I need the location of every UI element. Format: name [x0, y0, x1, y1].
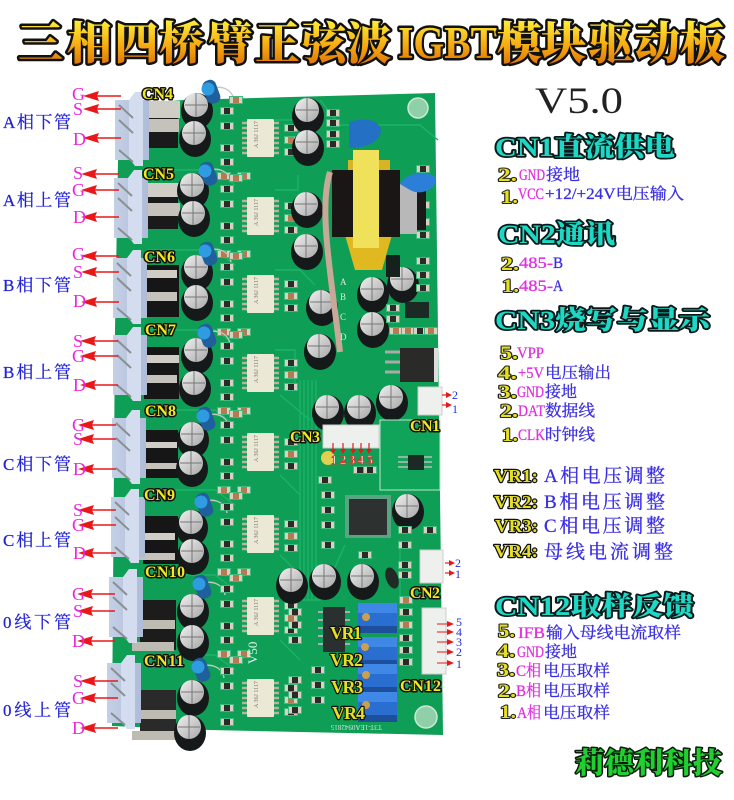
channel 2 CN5	[114, 160, 298, 258]
VR1: A相电压调整	[544, 465, 665, 487]
pin 2: 2.	[498, 681, 516, 702]
connector tags on board: VR4	[332, 703, 365, 723]
pin letters G S D: S	[73, 99, 83, 119]
heading CN2: CN2通讯	[498, 220, 615, 249]
pin letters G S D: D	[73, 291, 86, 311]
VR4: VR4:	[494, 541, 538, 561]
board traces	[148, 100, 438, 670]
channel 2 CN5: A 36J 1117	[254, 199, 260, 226]
pin 2: 接地	[546, 165, 580, 184]
pin letters G S D: G	[72, 346, 85, 366]
transformer: C	[340, 312, 346, 322]
pin 2: B	[553, 255, 563, 272]
pin 2: 2.	[501, 254, 519, 275]
pin letters G S D: D	[72, 631, 85, 651]
heading CN3: CN3烧写与显示	[495, 306, 714, 335]
pin letters G S D: D	[73, 129, 86, 149]
connector pin callouts: 1	[456, 657, 462, 671]
pin 4: 4.	[498, 363, 517, 384]
control area parts	[288, 466, 437, 714]
VR3	[495, 515, 665, 537]
pin 1: A	[553, 278, 563, 295]
callouts: gate source drain arrows	[77, 91, 121, 733]
VR2	[494, 491, 665, 513]
phase labels: 0线上管	[3, 701, 71, 720]
connector tags on board: CN1	[410, 418, 440, 435]
panel: CN12 description	[495, 591, 695, 723]
pin 5	[500, 343, 544, 364]
VR4: 母线电流调整	[544, 541, 673, 563]
pin 1	[500, 702, 610, 723]
blue trim potentiometers	[358, 603, 397, 722]
pin 2: GND	[519, 167, 545, 184]
pin letters G S D: G	[72, 84, 85, 104]
connector pin callouts	[437, 388, 462, 671]
channel 3 CN6	[113, 240, 298, 336]
pin letters G S D: G	[72, 180, 85, 200]
panel: VR adjustments	[494, 465, 673, 563]
pin 1: CLK	[518, 427, 545, 444]
pin 1: +12/+24V电压输入	[545, 185, 684, 203]
transformer: A	[340, 277, 347, 287]
connector tags on board: CN9	[144, 487, 175, 504]
transformer	[325, 120, 436, 352]
channel 7 CN10: A 36J 1117	[254, 599, 260, 626]
pin 1	[502, 425, 595, 446]
pin letters G S D: G	[72, 584, 85, 604]
pin 5: 5.	[500, 343, 518, 364]
phase labels: B相上管	[3, 363, 71, 382]
pin 5: VPP	[517, 345, 544, 362]
microcontroller	[345, 495, 391, 538]
lower capacitors	[276, 385, 424, 604]
connector pin callouts: 5	[456, 615, 462, 629]
pin letters G S D: S	[73, 671, 83, 691]
pin 4: +5V	[518, 365, 544, 382]
pin letters G S D: S	[73, 601, 83, 621]
small parts upper right	[326, 109, 438, 335]
pin 3: 接地	[545, 382, 577, 401]
pin 3: 3.	[498, 382, 517, 403]
panel: CN3 description	[495, 306, 714, 446]
pin letters G S D: S	[73, 163, 83, 183]
pin 1: 1.	[501, 187, 518, 208]
pin 4	[498, 363, 611, 384]
connector CN3	[321, 425, 379, 465]
phase labels: A相下管	[3, 113, 71, 132]
pin 3	[498, 382, 577, 403]
pin 5	[498, 621, 681, 642]
pin letters G S D: G	[72, 515, 85, 535]
connector pin callouts: 4	[456, 625, 462, 639]
heading CN1: CN1直流供电	[495, 133, 675, 162]
channel 4 CN7: A 36J 1117	[254, 356, 260, 383]
pin letters G S D: D	[73, 459, 86, 479]
pin 2	[501, 254, 563, 275]
title: 模块驱动板	[497, 19, 725, 69]
phase labels: C相下管	[3, 455, 71, 474]
VR1	[494, 465, 665, 487]
connector tags on board: VR3	[331, 677, 363, 697]
VR2: VR2:	[494, 492, 538, 512]
pin 2: 2.	[500, 401, 518, 422]
channel 5 CN8: A 36J 1117	[254, 435, 260, 462]
panel: CN1 description	[495, 133, 684, 208]
pin 1: A相	[517, 704, 541, 722]
phase labels: 0线下管	[3, 613, 71, 632]
transformer: D	[340, 332, 347, 342]
silk frame and small IC	[380, 420, 440, 490]
pin letters G S D: G	[72, 415, 85, 435]
board substrate	[112, 93, 443, 735]
channel 6 CN9: A 36J 1117	[254, 517, 260, 544]
connector pin callouts: 2	[452, 388, 458, 402]
pin 1: 485-	[519, 278, 553, 295]
phase labels: C相上管	[3, 531, 71, 550]
channel 6 CN9	[111, 489, 298, 576]
pin letters G S D: S	[73, 331, 83, 351]
pin 1: 1.	[502, 276, 519, 297]
VR4	[494, 541, 673, 563]
pin 4: 4.	[497, 641, 515, 662]
connector tags on board: CN4	[142, 86, 173, 103]
mounting holes	[408, 98, 437, 728]
channel 1 CN4: A 36J 1117	[254, 121, 260, 148]
heading CN12: CN12取样反馈	[495, 591, 695, 621]
board silkscreen: V50	[245, 642, 260, 664]
title: 三相四桥臂正弦波	[18, 19, 391, 69]
connector tags on board: CN3	[290, 429, 320, 446]
connector CN12	[422, 608, 446, 674]
pin 2: 485-	[519, 255, 553, 272]
pin 1: 电压取样	[543, 704, 610, 722]
connector pin callouts: 2	[455, 556, 461, 570]
connector CN1	[418, 387, 442, 415]
pin letters G S D: G	[72, 244, 85, 264]
SOP IC	[318, 607, 350, 652]
power IC	[385, 348, 438, 382]
pin letters G S D: S	[73, 429, 83, 449]
pin 3: 3.	[497, 660, 515, 681]
pin letters G S D: D	[73, 375, 86, 395]
VR2: B相电压调整	[544, 491, 665, 513]
VR3: C相电压调整	[544, 515, 665, 537]
pin 5: IFB	[518, 625, 545, 642]
pin letters G S D: D	[73, 543, 86, 563]
connector tags on board: CN8	[145, 403, 176, 420]
channel 5 CN8	[112, 405, 298, 494]
pin 2: B相	[516, 682, 541, 700]
pin 1	[501, 185, 684, 208]
board code: T3T-1EA0942815	[330, 723, 382, 731]
pin 5: 5.	[498, 621, 515, 642]
pin letters G S D	[72, 84, 86, 738]
pin 4: 电压输出	[545, 364, 611, 382]
phase labels: B相下管	[3, 276, 71, 295]
connector tags on board: CN7	[145, 322, 176, 339]
pin letters G S D: S	[73, 262, 83, 282]
pin 1: VCC	[518, 186, 544, 203]
phase labels: A相上管	[3, 191, 71, 210]
pin 2	[500, 401, 595, 422]
channel 4 CN7	[113, 322, 298, 415]
connector tags on board	[142, 86, 441, 723]
connector CN2	[420, 550, 443, 583]
connector pin callouts: 1	[455, 567, 461, 581]
pin 5: 输入母线电流取样	[546, 624, 681, 642]
pin 2	[498, 681, 610, 702]
pin 2: 2.	[498, 165, 517, 186]
connector tags on board: CN6	[144, 249, 175, 266]
pin letters G S D: S	[73, 500, 83, 520]
pin 3	[497, 660, 610, 681]
channel 7 CN10	[109, 569, 298, 661]
channel 1 CN4	[115, 78, 298, 180]
connector pin callouts: 2	[456, 645, 462, 659]
VR1: VR1:	[494, 466, 538, 486]
pin 2: DAT	[518, 403, 545, 420]
connector tags on board: VR2	[330, 650, 363, 670]
channel 3 CN6: A 36J 1117	[254, 277, 260, 304]
pin 1: 1.	[500, 702, 516, 723]
pin 3: C相	[516, 662, 541, 680]
connector tags on board: VR1	[330, 623, 362, 643]
panel: circuit board photo	[107, 78, 446, 751]
version label: V5.0	[535, 81, 623, 122]
pin 1: 时钟线	[545, 426, 595, 444]
CN3 pin arrows and numbers: 12345	[331, 452, 374, 467]
title	[18, 18, 725, 69]
pin 4: 接地	[545, 642, 577, 661]
power capacitors	[291, 98, 419, 370]
CN3 pin arrows and numbers	[330, 443, 374, 467]
pin 2	[498, 165, 580, 186]
pin 1: 1.	[502, 425, 518, 446]
transformer: B	[340, 292, 346, 302]
panel: CN2 description	[498, 220, 615, 297]
connector pin callouts: 3	[456, 635, 462, 649]
phase labels	[3, 113, 71, 720]
pin 1	[502, 276, 563, 297]
connector tags on board: CN10	[145, 564, 185, 581]
connector tags on board: CN11	[144, 653, 184, 670]
pin 3: GND	[517, 384, 544, 401]
channel 8 CN11: A 36J 1117	[254, 681, 260, 708]
channel 8 CN11	[107, 655, 298, 751]
pin letters G S D: D	[73, 207, 86, 227]
pin 2: 数据线	[545, 402, 595, 420]
title: IGBT	[398, 18, 497, 68]
connector pin callouts: 1	[452, 402, 458, 416]
pin 3: 电压取样	[543, 662, 610, 680]
pin letters G S D: G	[72, 688, 85, 708]
connector tags on board: CN2	[410, 585, 440, 602]
VR3: VR3:	[495, 516, 538, 536]
pin 2: 电压取样	[543, 682, 610, 700]
pin letters G S D: D	[72, 718, 85, 738]
connector tags on board: CN12	[400, 678, 441, 695]
brand label: 莉德利科技	[575, 747, 722, 780]
pin 4	[497, 641, 577, 662]
connector tags on board: CN5	[143, 166, 174, 183]
pin 4: GND	[517, 644, 544, 661]
